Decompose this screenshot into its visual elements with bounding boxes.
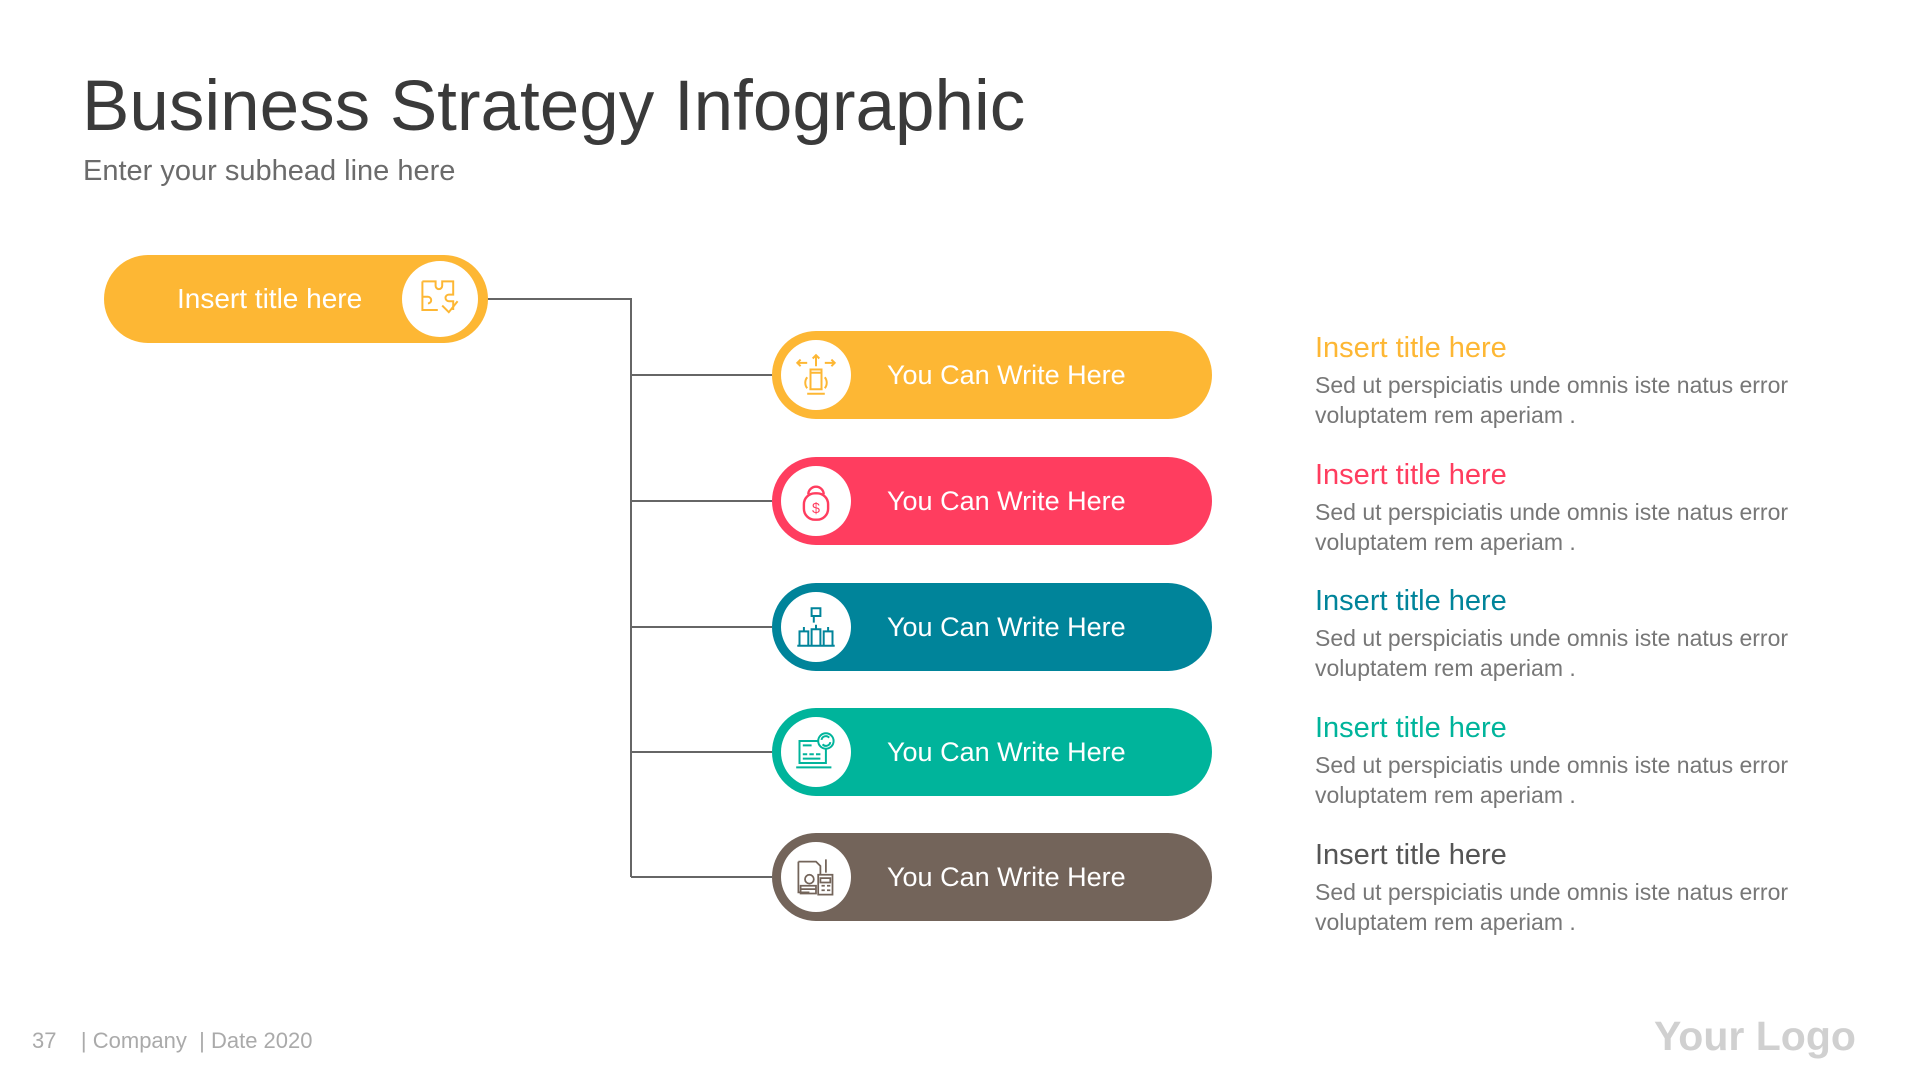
description 5: Sed ut perspiciatis unde omnis iste natus error voluptatem rem aperiam . bbox=[1315, 879, 1788, 935]
description 1 bbox=[1315, 332, 1788, 428]
icon: puzzle bbox=[402, 261, 478, 337]
pill 4 bbox=[772, 708, 1212, 796]
description 3 bbox=[1315, 585, 1788, 681]
top pill: main title bbox=[104, 255, 488, 343]
description 2: Sed ut perspiciatis unde omnis iste natus error voluptatem rem aperiam . bbox=[1315, 499, 1788, 555]
description 4 bbox=[1315, 712, 1788, 808]
pill 5: You Can Write Here bbox=[887, 862, 1126, 892]
description 2: Insert title here bbox=[1315, 459, 1507, 491]
description 4: Sed ut perspiciatis unde omnis iste natus error voluptatem rem aperiam . bbox=[1315, 752, 1788, 808]
description 1: Insert title here bbox=[1315, 332, 1507, 364]
pill 4: You Can Write Here bbox=[887, 737, 1126, 767]
pill 3 bbox=[772, 583, 1212, 671]
footer: 37 | Company | Date 2020 bbox=[32, 1028, 312, 1053]
pill 1: You Can Write Here bbox=[887, 360, 1126, 390]
description 2 bbox=[1315, 459, 1788, 555]
description 3: Sed ut perspiciatis unde omnis iste natus error voluptatem rem aperiam . bbox=[1315, 625, 1788, 681]
pill 3: You Can Write Here bbox=[887, 612, 1126, 642]
description 5 bbox=[1315, 839, 1788, 935]
description 3: Insert title here bbox=[1315, 585, 1507, 617]
pill 1 bbox=[772, 331, 1212, 419]
description 4: Insert title here bbox=[1315, 712, 1507, 744]
logo: Your Logo bbox=[1654, 1013, 1856, 1059]
pill 2: You Can Write Here bbox=[887, 486, 1126, 516]
top pill: main title: Insert title here bbox=[177, 283, 362, 314]
description 1: Sed ut perspiciatis unde omnis iste natus error voluptatem rem aperiam . bbox=[1315, 372, 1788, 428]
subhead: Enter your subhead line here bbox=[83, 155, 455, 187]
pill 2 bbox=[772, 457, 1212, 545]
description 5: Insert title here bbox=[1315, 839, 1507, 871]
pill 2: $ bbox=[812, 501, 820, 517]
pill 5 bbox=[772, 833, 1212, 921]
title: Business Strategy Infographic bbox=[82, 67, 1025, 146]
